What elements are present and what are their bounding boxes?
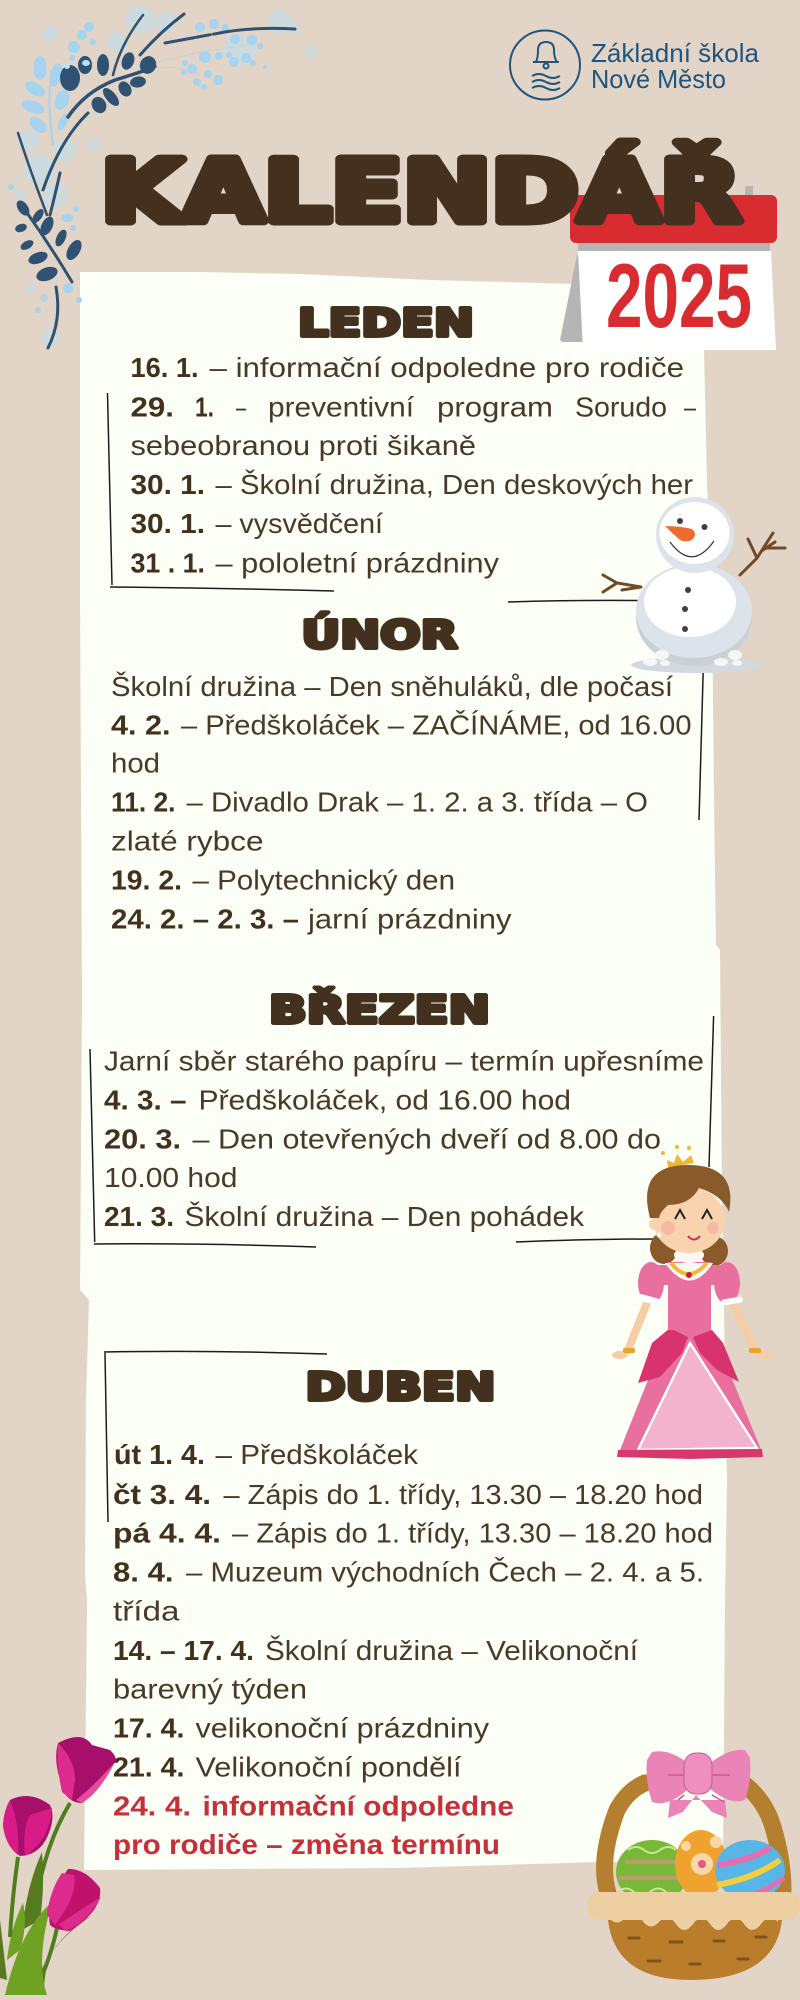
text block: April events: barevný týden — [113, 1674, 307, 1704]
icon: tulips — [0, 1737, 116, 1995]
text block: January events: – pololetní prázdniny — [216, 548, 499, 578]
heading: BŘEZEN: BŘEZEN — [269, 986, 490, 1033]
text block: April events: – Zápis do 1. třídy, 13.30 – 18.20 hod — [232, 1518, 713, 1548]
text block: January events: 30. 1. — [130, 469, 205, 500]
text block: January events: 1. — [195, 392, 214, 422]
text block: April events: 14. – 17. 4. — [113, 1635, 254, 1666]
text block: January events: Sorudo — [575, 392, 667, 422]
text block: January events: – — [236, 392, 246, 422]
text block: April events: čt 3. 4. — [113, 1479, 211, 1510]
callout: red notice about parent meeting — [113, 1790, 514, 1860]
text block: April events: velikonoční prázdniny — [196, 1712, 489, 1744]
text block: January events: preventivní — [268, 392, 414, 422]
text block: April events: Školní družina – Velikonoční — [265, 1635, 638, 1666]
callout: red notice about parent meeting: informační odpoledne — [202, 1790, 514, 1822]
sketch frame lines: March — [90, 1016, 714, 1247]
icon: bell and waves in circle — [510, 30, 580, 100]
text block: April events: třída — [113, 1596, 180, 1626]
bow — [647, 1750, 750, 1818]
text block: March events: Školní družina – Den pohádek — [184, 1201, 585, 1232]
text block: April events: pá 4. 4. — [113, 1518, 221, 1548]
text block: January events: sebeobranou proti šikaně — [130, 430, 476, 461]
text block: March events: 21. 3. — [104, 1201, 174, 1232]
text block: March events: Předškoláček, od 16.00 hod — [198, 1084, 571, 1116]
text block: April events — [113, 1439, 713, 1782]
heading: ÚNOR: ÚNOR — [302, 611, 458, 658]
text block: January events: 16. 1. — [130, 352, 198, 383]
logo text line 2: Nové Město — [591, 64, 726, 94]
panel: paper sheet — [80, 272, 727, 1870]
text block: February events: Školní družina – Den sněhuláků, dle počasí — [111, 671, 673, 702]
text block: April events: 8. 4. — [113, 1556, 174, 1588]
icon: snowman — [603, 497, 785, 673]
text block: April events: út 1. 4. — [114, 1439, 205, 1470]
text block: January events — [130, 352, 696, 578]
text block: March events — [104, 1046, 704, 1232]
text block: March events: Jarní sběr starého papíru – termín upřesníme — [104, 1046, 704, 1076]
text block: March events: 4. 3. – — [104, 1084, 186, 1116]
text block: January events: – informační odpoledne pro rodiče — [210, 352, 684, 383]
callout: red notice about parent meeting: 24. 4. — [113, 1790, 191, 1822]
icon: princess — [612, 1145, 773, 1459]
text block: January events: 29. — [130, 392, 174, 422]
text block: January events: 30. 1. — [130, 508, 205, 539]
text block: February events: 4. 2. — [111, 710, 170, 740]
text block: April events: – Předškoláček — [216, 1439, 419, 1470]
text block: March events: – Den otevřených dveří od 8.00 do — [192, 1124, 661, 1154]
text block: February events — [111, 671, 692, 934]
easter eggs — [616, 1830, 785, 1904]
text block: January events: – Školní družina, Den deskových her — [216, 469, 693, 500]
text block: April events: Velikonoční pondělí — [196, 1752, 462, 1782]
text block: February events: 19. 2. — [111, 864, 182, 896]
text block: February events: 24. 2. – 2. 3. – — [111, 904, 299, 934]
text block: April events: – Zápis do 1. třídy, 13.30 – 18.20 hod — [224, 1479, 703, 1510]
text block: February events: – Polytechnický den — [192, 864, 455, 896]
text block: April events: 21. 4. — [113, 1752, 184, 1782]
sketch frame lines: April — [104, 1351, 327, 1522]
heading: DUBEN: DUBEN — [306, 1365, 496, 1410]
callout: red notice about parent meeting: pro rodiče – změna termínu — [113, 1829, 500, 1860]
text block: March events: 10.00 hod — [104, 1162, 238, 1193]
text block: January events: 31 . 1. — [130, 548, 205, 578]
icon: Easter basket — [587, 1750, 800, 1980]
text block: February events: 11. 2. — [111, 786, 176, 818]
sketch frame lines: January — [108, 393, 704, 820]
title: KALENDÁŘ — [101, 141, 741, 242]
icon: wall calendar 2025 — [560, 186, 777, 350]
text block: April events: 17. 4. — [113, 1712, 184, 1744]
text block: April events: – Muzeum východních Čech – 2. 4. a 5. — [186, 1556, 704, 1588]
logo text line 1: Základní škola — [591, 38, 760, 68]
text block: January events: – — [684, 392, 696, 422]
logo: Základní škola Nové Město — [510, 30, 760, 100]
text block: March events: 20. 3. — [104, 1124, 181, 1154]
text block: January events: program — [437, 392, 553, 422]
heading: LEDEN: LEDEN — [298, 301, 474, 346]
icon: winter branch decoration — [8, 6, 318, 348]
text block: February events: zlaté rybce — [111, 826, 264, 856]
text block: February events: – Divadlo Drak – 1. 2. a 3. třída – O — [186, 786, 648, 818]
text block: February events: – Předškoláček – ZAČÍNÁME, od 16.00 — [181, 710, 692, 740]
text block: January events: – vysvědčení — [216, 508, 383, 539]
text block: February events: jarní prázdniny — [307, 904, 512, 934]
text block: February events: hod — [111, 748, 160, 778]
